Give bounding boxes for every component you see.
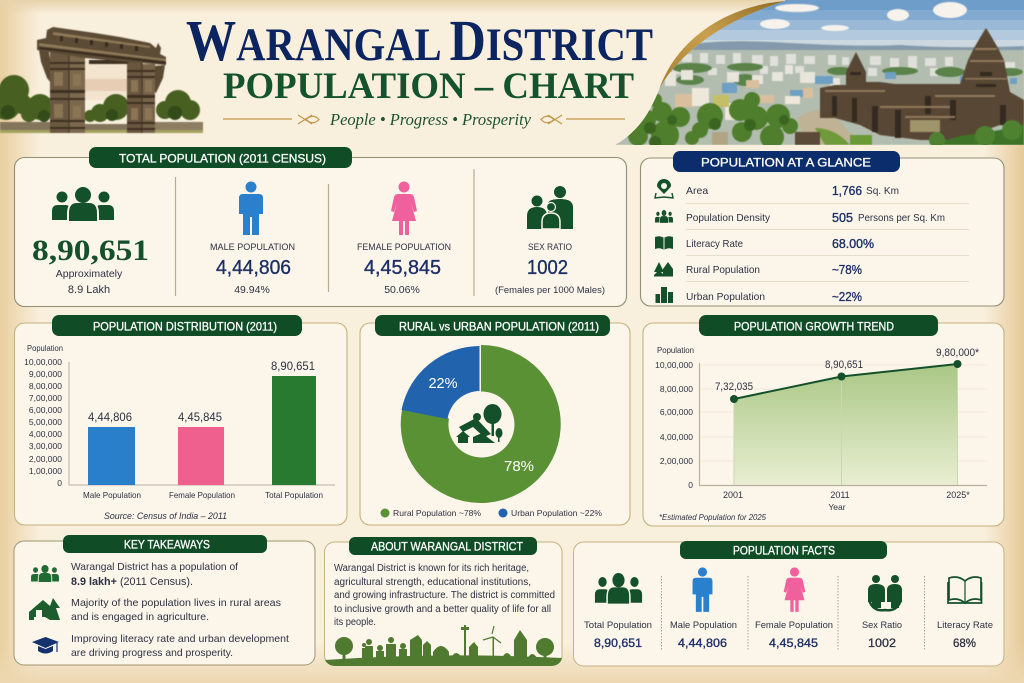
line chart: 2011 [830,490,850,500]
female population figure: FEMALE POPULATION [357,242,451,253]
bar chart: Female Population [169,490,235,500]
sex ratio figure: 1002 [527,257,568,279]
sex ratio figure: SEX RATIO [528,242,572,253]
bar chart: 5,00,000 [29,417,62,427]
row: rural population [654,262,862,277]
fact: male population: 4,44,806 [678,636,727,650]
takeaway: literacy: Improving literacy rate and urban development [71,633,289,645]
bar chart: Population [27,344,63,353]
panel: population at a glance [640,151,1004,306]
legend: Urban Population ~22% [511,508,602,518]
takeaway: population: 8.9 lakh+ (2011 Census). [71,576,193,588]
row: urban population: Urban Population [686,291,765,303]
line chart: Population [657,346,694,355]
panel: about Warangal [324,537,562,666]
bar chart [24,344,335,500]
donut chart: 22% [428,376,458,392]
heading: population distribution [52,315,302,336]
takeaway: literacy [32,633,289,659]
heading: population facts [680,541,887,559]
takeaway: literacy: are driving progress and prosperity. [71,647,233,659]
bar chart: Male Population [83,490,141,500]
bar chart: 4,45,845 [178,410,222,424]
heading: rural vs urban: RURAL vs URBAN POPULATION (2011) [399,320,599,334]
fact: total population: Total Population [584,620,652,631]
fact: sex ratio [862,575,902,650]
bar chart: 0 [57,478,62,488]
footnote: *Estimated Population for 2025 [659,513,767,522]
icon: rural home and trees [456,404,502,443]
about text: agricultural strength, educational institutions, [334,577,531,588]
line chart: 8,90,651 [825,359,863,371]
bar chart: 4,00,000 [29,429,62,439]
line chart: 7,32,035 [715,381,753,393]
row: population density: Persons per Sq. Km [858,213,945,224]
line chart: 2001 [723,490,743,500]
row: urban population [656,287,862,304]
trees behind the gate [0,75,200,122]
fact: female population: 4,45,845 [769,636,818,650]
fact: female population [755,567,833,650]
about text: its people. [334,617,376,628]
subtitle: POPULATION – CHART [223,66,634,107]
bar: female [178,427,224,485]
line chart: 2025* [946,490,970,500]
bar chart: 8,00,000 [29,381,62,391]
takeaway: rural: Majority of the population lives in rural areas [71,597,281,609]
bar: male [88,427,135,485]
fact: total population [584,573,652,650]
title: WARANGAL DISTRICT [186,8,653,73]
header image: city and temples [610,0,1024,149]
total population figure: 8,90,651 [32,234,149,267]
panel: total population [14,147,626,306]
fact: sex ratio: 1002 [868,636,896,650]
bar chart: 9,00,000 [29,369,62,379]
bar chart: 4,44,806 [88,410,132,424]
bar chart: 2,00,000 [29,454,62,464]
heading: population facts: POPULATION FACTS [733,544,835,558]
heading: population distribution: POPULATION DISTRIBUTION (2011) [93,320,277,334]
header image: Warangal fort gate [0,27,203,133]
heading: about Warangal [349,537,537,555]
bar chart: 6,00,000 [29,405,62,415]
about text: to inclusive growth and a better quality of life for all [334,604,551,615]
fact: literacy rate: 68% [953,636,976,650]
female population figure [357,182,451,296]
line chart: 2,00,000 [660,456,693,466]
heading: rural vs urban [375,315,610,336]
bar chart: 10,00,000 [24,357,62,367]
skyline illustration [325,625,562,666]
heading: growth trend: POPULATION GROWTH TREND [734,320,894,334]
row: area [655,179,899,198]
line chart: 8,00,000 [660,384,693,394]
fact: female population: Female Population [755,620,833,631]
about text: and growing infrastructure. The district is committed [334,590,555,601]
row: literacy rate: 68.00% [832,236,874,251]
heading: population at a glance: POPULATION AT A GLANCE [701,156,871,170]
total population figure [32,187,149,296]
fact: male population: Male Population [670,620,737,631]
sex ratio figure [495,186,605,296]
source note: Source: Census of India – 2011 [104,511,227,522]
about text [334,563,555,628]
takeaway: population [31,561,238,588]
legend: Rural Population ~78% [393,508,481,518]
heading: growth trend [699,315,938,336]
row: area: Sq. Km [866,186,899,197]
bar chart: 1,00,000 [29,466,62,476]
heading: key takeaways [63,535,267,553]
bar chart: Total Population [265,490,323,500]
tagline with ornaments [223,110,625,129]
bar chart: 8,90,651 [271,359,315,373]
bar: total [272,376,316,485]
about text: Warangal District is known for its rich heritage, [334,563,529,574]
legend [380,508,602,518]
bar chart: 3,00,000 [29,441,62,451]
line chart: 9,80,000* [936,347,980,359]
line chart: Year [828,502,846,512]
row: area: Area [686,185,708,197]
line chart: 10,00,000 [655,360,693,370]
heading: total population [89,147,352,168]
panel: rural vs urban [360,315,630,525]
male population figure: 49.94% [234,284,270,296]
row: area: 1,766 [832,183,862,198]
heading: total population: TOTAL POPULATION (2011 CENSUS) [119,152,326,166]
male population figure [210,182,295,296]
row: rural population: Rural Population [686,264,760,276]
bar chart: 7,00,000 [29,393,62,403]
heading: population at a glance [673,151,900,172]
row: population density: Population Density [686,212,771,224]
fact: sex ratio: Sex Ratio [862,620,902,631]
sex ratio figure: (Females per 1000 Males) [495,285,605,296]
total population figure: Approximately [56,268,123,280]
line chart [655,346,987,512]
donut chart: 78% [504,458,534,475]
fact: male population [670,567,737,650]
row: population density: 505 [832,210,853,225]
line chart: 6,00,000 [660,407,693,417]
total population figure: 8.9 Lakh [68,284,110,296]
tagline with ornaments: People • Progress • Prosperity [329,110,532,129]
takeaway: rural: and is engaged in agriculture. [71,611,209,623]
row: population density [655,210,945,225]
fact: total population: 8,90,651 [594,636,642,650]
decorative gold swoosh [659,1,785,90]
fact: literacy rate [937,577,993,650]
male population figure: MALE POPULATION [210,242,295,253]
row: literacy rate [655,236,874,251]
line chart: 0 [688,480,693,490]
row: literacy rate: Literacy Rate [686,238,743,250]
male population figure: 4,44,806 [216,257,291,279]
panel: population facts [574,541,1004,666]
line chart: 4,00,000 [660,432,693,442]
gate stonework [39,50,165,93]
row: urban population: ~22% [832,289,862,304]
heading: about Warangal: ABOUT WARANGAL DISTRICT [371,540,524,554]
row: rural population: ~78% [832,262,862,277]
donut chart [401,345,561,503]
panel: population distribution [14,315,347,525]
panel: growth trend [643,315,1004,526]
takeaway: rural [29,597,281,623]
takeaway: population: Warangal District has a population of [71,561,238,573]
female population figure: 50.06% [384,284,420,296]
temple complex [820,28,1024,140]
fact: literacy rate: Literacy Rate [937,620,993,631]
heading: key takeaways: KEY TAKEAWAYS [124,538,210,552]
female population figure: 4,45,845 [364,257,441,279]
panel: key takeaways [14,535,315,665]
